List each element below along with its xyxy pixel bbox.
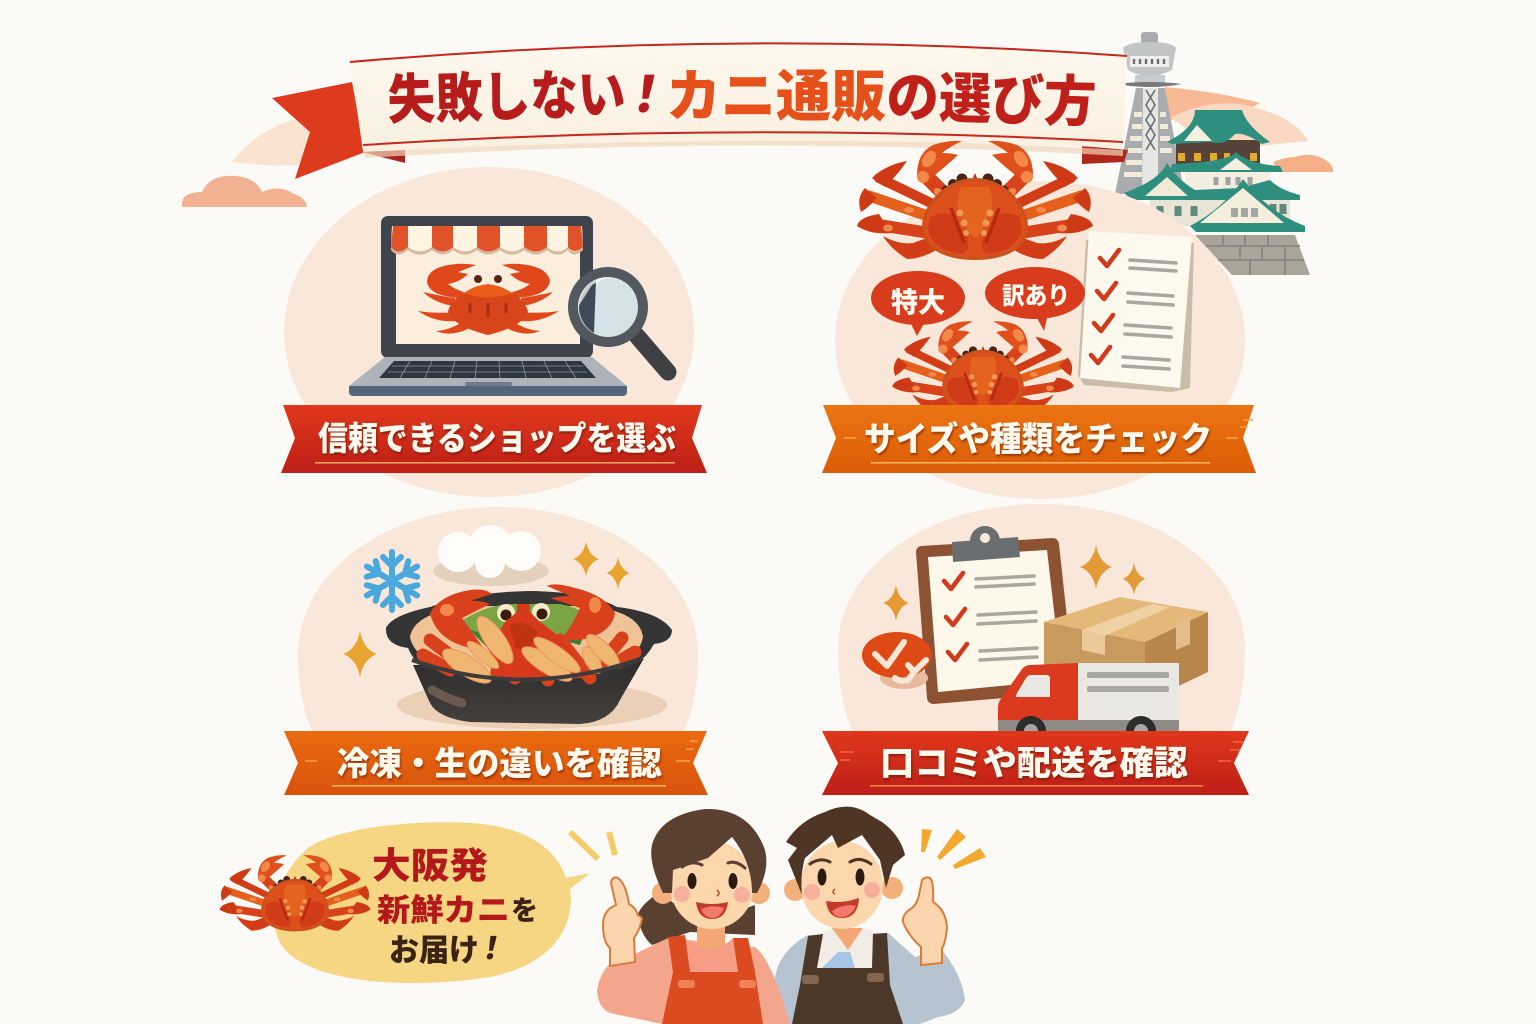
- hand: [903, 877, 947, 965]
- ribbon: [284, 731, 708, 795]
- ribbon: [281, 405, 707, 473]
- cloud right: [1273, 155, 1333, 172]
- icon: crab: [219, 855, 371, 931]
- title text: の選び方: [886, 66, 1097, 133]
- background circle: [284, 167, 694, 497]
- panel: reviews and delivery: [822, 504, 1249, 795]
- banner label: 冷凍・生の違いを確認: [337, 745, 662, 782]
- Tsutenkaku tower: [1115, 32, 1182, 196]
- background circle: [838, 504, 1245, 731]
- speech bubble: bargain: 訳あり: [1002, 283, 1070, 310]
- icon: delivery truck: [998, 663, 1179, 746]
- callout text: ！: [473, 931, 510, 966]
- staff characters giving thumbs up: [570, 807, 986, 1024]
- icon: rays right: [921, 829, 986, 869]
- banner label: 信頼できるショップを選ぶ: [318, 420, 676, 457]
- peach hills: [232, 87, 1308, 166]
- icon: review bubble: [862, 632, 932, 689]
- ribbon: [822, 731, 1249, 795]
- icon: rays left: [570, 832, 615, 859]
- callout text: 大阪発: [372, 845, 488, 886]
- banner body: [350, 43, 1127, 152]
- pot shadow: [397, 681, 667, 729]
- hand: [603, 878, 642, 966]
- title text: カニ通販: [666, 65, 886, 128]
- icon: crab on screen: [418, 264, 559, 335]
- title banner: [272, 43, 1128, 179]
- speech bubble: [274, 822, 590, 983]
- icon: clipboard: [916, 526, 1075, 704]
- icons: sparkles: [883, 545, 1146, 621]
- panel: check size and type: [822, 141, 1256, 499]
- ribbon right fold: [1082, 146, 1128, 164]
- ribbon: [822, 405, 1256, 473]
- icon: checklist: [1078, 231, 1194, 392]
- icon: steam: [433, 525, 549, 586]
- speech bubble: extra large: 特大: [891, 287, 945, 318]
- ribbon left fold: [362, 145, 405, 163]
- icon: snowflake: [362, 552, 422, 610]
- icon: small crab: [892, 321, 1074, 413]
- scenery: Osaka skyline with clouds: [182, 32, 1333, 275]
- background circle: [298, 507, 698, 731]
- icon: laptop with shop: [349, 216, 627, 396]
- icon: magnifying glass: [568, 267, 668, 372]
- title text: ！: [616, 66, 676, 123]
- callout: shipped from Osaka: [219, 822, 590, 983]
- Osaka castle: [1124, 110, 1310, 275]
- icons: sparkles: [343, 541, 630, 677]
- woman: [597, 809, 790, 1024]
- background circle: [835, 181, 1245, 499]
- panel: choose a trusted shop: [281, 167, 707, 497]
- speech bubble: extra large: [871, 271, 965, 336]
- callout text: 新鮮カニ: [377, 893, 510, 928]
- title text: [387, 65, 1097, 133]
- banner label: サイズや種類をチェック: [864, 420, 1212, 459]
- panel: frozen or fresh: [284, 507, 708, 795]
- banner label: 口コミや配送を確認: [880, 745, 1188, 783]
- face: [784, 879, 806, 901]
- callout text: [372, 845, 538, 968]
- banner shadow lip: [363, 139, 1123, 158]
- face: [652, 882, 674, 904]
- callout text: お届け: [389, 933, 479, 968]
- title text: 失敗しない: [387, 65, 626, 131]
- icon: cardboard box: [1044, 597, 1208, 702]
- cloud left: [182, 176, 307, 207]
- speech bubble: bargain: [985, 267, 1085, 331]
- ribbon left tail: [272, 82, 365, 179]
- icon: hot pot with crab: [386, 584, 672, 724]
- callout text: を: [511, 896, 538, 926]
- man: [775, 807, 965, 1024]
- icon: large crab: [857, 141, 1093, 260]
